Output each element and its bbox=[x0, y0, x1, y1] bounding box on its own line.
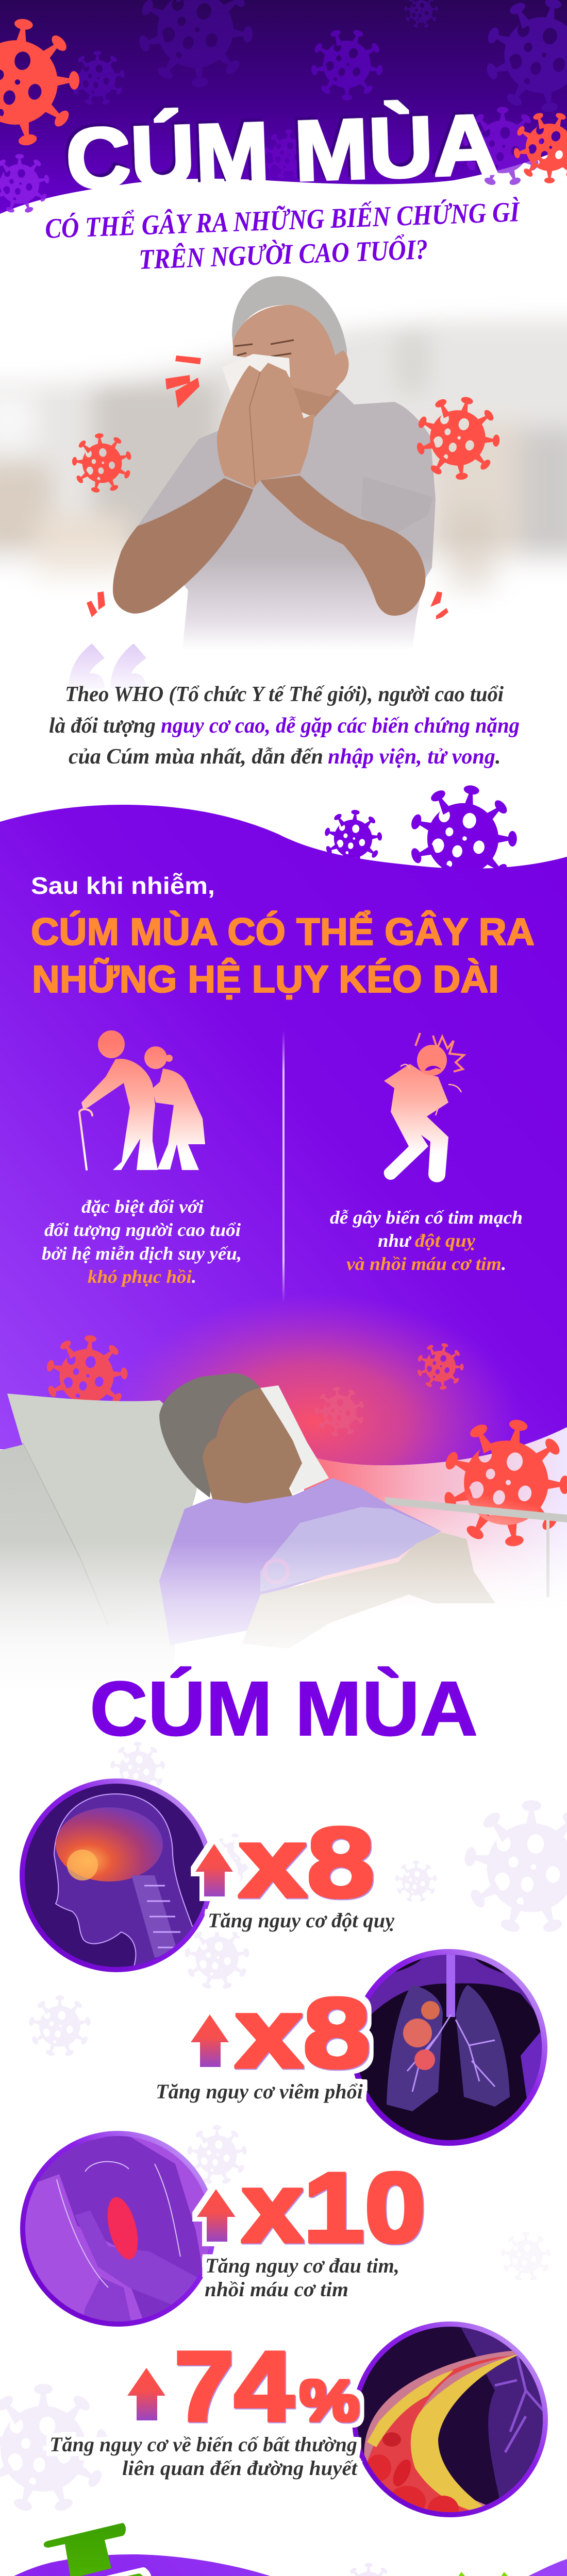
white pillow behind head bbox=[260, 1385, 329, 1494]
title: CÚM MÙA bbox=[64, 97, 499, 207]
image: artery circle bbox=[351, 2318, 552, 2522]
hero faded virus pattern bbox=[0, 0, 567, 214]
quote text: nhập viện, tử vong bbox=[328, 745, 495, 769]
panel: after infection bbox=[0, 776, 567, 1613]
panel: vaccine bbox=[0, 2523, 567, 2576]
pale background viruses bbox=[0, 1742, 567, 2513]
icon: quote mark bbox=[69, 643, 146, 689]
hero purple wave background bbox=[0, 0, 567, 214]
motion marks bbox=[87, 591, 448, 619]
sleeve shading bbox=[361, 477, 433, 536]
value x10: x10 bbox=[242, 2152, 426, 2263]
left arm bbox=[113, 478, 253, 614]
panel: hospital patient photo bbox=[0, 1373, 567, 1695]
panel: risk statistics bbox=[0, 1742, 567, 2522]
caption: Tăng nguy cơ đột quỵ bbox=[208, 1909, 394, 1932]
value x8: x8 bbox=[235, 1977, 371, 2088]
quote text: của Cúm mùa nhất, dẫn đến bbox=[69, 745, 323, 769]
panel: WHO quote bbox=[49, 643, 520, 769]
subtitle bbox=[44, 195, 521, 275]
icon: closing quote bbox=[448, 2572, 528, 2576]
icon: red virus right of man bbox=[407, 387, 509, 488]
caption: Tăng nguy cơ đau tim, bbox=[205, 2254, 399, 2277]
face bbox=[233, 305, 348, 397]
stat 4: blood sugar bbox=[49, 2331, 359, 2480]
icon: red virus right bbox=[503, 101, 567, 193]
image: brain circle bbox=[20, 1777, 216, 1973]
text: elderly bbox=[42, 1196, 242, 1287]
icon: red virus left of man bbox=[69, 430, 135, 496]
face and neck bbox=[203, 1388, 302, 1504]
pale virus on wave bbox=[342, 2563, 395, 2576]
neck bbox=[289, 376, 340, 417]
caption bbox=[205, 2254, 399, 2301]
pillow bbox=[7, 1394, 206, 1628]
icon: syringe bbox=[42, 2523, 148, 2576]
right arm bbox=[260, 476, 425, 616]
image: lungs circle bbox=[351, 1947, 547, 2148]
caption bbox=[49, 2433, 358, 2480]
hands bbox=[217, 363, 314, 488]
pink glow bbox=[130, 1304, 504, 1465]
stat 1: stroke bbox=[195, 1807, 394, 1932]
text: cardiovascular bbox=[330, 1207, 523, 1274]
text: cardiovascular: . bbox=[502, 1253, 506, 1274]
value 74 percent: % bbox=[299, 2368, 359, 2433]
flange and barrel bbox=[42, 2573, 146, 2576]
icon: large red virus left bbox=[0, 10, 88, 154]
quote text: Theo WHO (Tổ chức Y tế Thế giới), người cao tuổi bbox=[65, 683, 504, 706]
value 74 percent: 74 bbox=[174, 2331, 294, 2442]
tissue bbox=[222, 354, 290, 395]
text: elderly: đối tượng người cao tuổi bbox=[44, 1219, 241, 1240]
stat 3: heart attack bbox=[197, 2152, 426, 2301]
hair bbox=[159, 1373, 260, 1498]
image: heart circle bbox=[20, 2128, 216, 2329]
text: elderly: . bbox=[192, 1266, 196, 1287]
heading: Sau khi nhiễm, bbox=[31, 872, 215, 899]
quote text bbox=[49, 683, 520, 769]
closed eyes bbox=[235, 340, 294, 357]
text: elderly: bởi hệ miễn dịch suy yếu, bbox=[42, 1243, 242, 1264]
caption: liên quan đến đường huyết bbox=[122, 2456, 358, 2480]
background fade top bbox=[0, 227, 567, 384]
text: elderly: khó phục hồi bbox=[88, 1266, 192, 1287]
man bbox=[113, 276, 436, 650]
photo bottom fade bbox=[0, 1540, 567, 1695]
text: cardiovascular: như bbox=[378, 1230, 411, 1251]
band fade bbox=[304, 1494, 567, 1613]
divider bbox=[282, 1030, 285, 1302]
quote text: nguy cơ cao, dễ gặp các biến chứng nặng bbox=[161, 714, 520, 738]
heading: CÚM MÙA: CÚM MÙA bbox=[90, 1665, 478, 1752]
sneeze marks bbox=[165, 355, 201, 408]
text: elderly: đặc biệt đối với bbox=[81, 1196, 204, 1217]
plunger bbox=[44, 2523, 126, 2576]
icons: viruses on wave bbox=[322, 776, 526, 901]
hospital gown bbox=[159, 1478, 441, 1645]
stat 2: pneumonia bbox=[156, 1977, 371, 2103]
icon: man with chest pain bbox=[384, 1033, 464, 1182]
caption: nhồi máu cơ tim bbox=[205, 2278, 348, 2301]
subtitle: TRÊN NGƯỜI CAO TUỔI? bbox=[138, 233, 428, 275]
text: cardiovascular: dễ gây biến cố tim mạch bbox=[330, 1207, 523, 1228]
hair bbox=[232, 276, 347, 371]
quote text: là đối tượng bbox=[49, 714, 156, 738]
text: cardiovascular: và nhồi máu cơ tim bbox=[346, 1253, 502, 1274]
up arrow bbox=[197, 2189, 236, 2242]
up arrow bbox=[127, 2368, 165, 2420]
up arrow bbox=[191, 2014, 229, 2067]
arm and hand bbox=[242, 1532, 495, 1649]
heading bbox=[31, 872, 535, 1001]
caption: Tăng nguy cơ về biến cố bất thường bbox=[49, 2433, 357, 2456]
blanket bbox=[260, 1507, 441, 1592]
section background wave bbox=[0, 2554, 567, 2576]
heading: CÚM MÙA CÓ THỂ GÂY RA bbox=[31, 910, 535, 953]
text: cardiovascular: đột quỵ bbox=[415, 1230, 476, 1251]
value x8: x8 bbox=[239, 1807, 375, 1918]
heading: NHỮNG HỆ LỤY KÉO DÀI bbox=[32, 958, 499, 1001]
blurred room background bbox=[0, 319, 567, 598]
up arrow bbox=[195, 1844, 233, 1896]
panel: sneezing elderly man photo bbox=[0, 227, 567, 778]
hospital bed rail bbox=[385, 1497, 567, 1522]
caption: Tăng nguy cơ viêm phổi bbox=[156, 2080, 363, 2103]
icons: viruses around patient bbox=[41, 1331, 567, 1558]
bed bbox=[0, 1443, 175, 1690]
band under wave bbox=[304, 1422, 567, 1607]
quote text: . bbox=[495, 745, 501, 769]
icon: elderly couple bbox=[79, 1030, 205, 1170]
syringe white outline bbox=[42, 2571, 148, 2576]
background fade bottom bbox=[0, 536, 567, 623]
panel: hero header bbox=[0, 0, 567, 275]
shirt bbox=[138, 391, 436, 650]
section background wave bbox=[0, 805, 567, 1465]
